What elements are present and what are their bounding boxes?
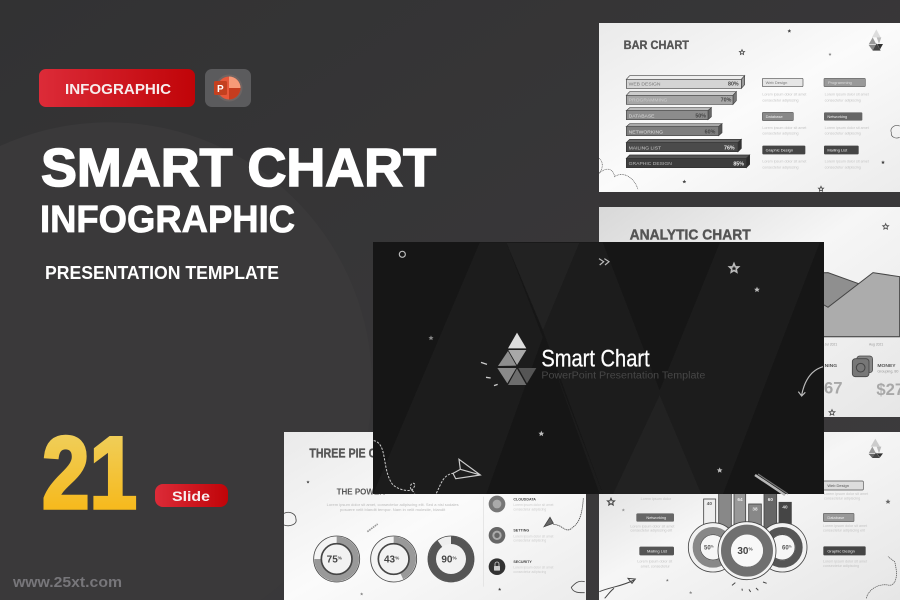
chart: area mountains bbox=[824, 272, 900, 338]
icon: paper plane bbox=[544, 498, 583, 530]
bar: mailing list bbox=[626, 139, 741, 152]
chart: donut 90 percent bbox=[428, 536, 474, 582]
icon: clouds bbox=[599, 125, 900, 189]
feature: cloud data: Lorem ipsum dolor sit amet bbox=[513, 503, 554, 507]
text: descriptions: consectetur adipiscing bbox=[825, 132, 861, 136]
bar: networking: NETWORKING bbox=[629, 129, 663, 135]
bar: graphic design bbox=[626, 155, 750, 168]
chart: vertical bars: 38 bbox=[752, 506, 758, 511]
stat: earning: 67 bbox=[824, 378, 843, 397]
badge: slide: Slide bbox=[172, 488, 210, 504]
icon: logo bbox=[869, 29, 883, 51]
bar: graphic design: GRAPHIC DESIGN bbox=[629, 161, 672, 167]
text: descriptions: Lorem ipsum dolor sit amet bbox=[824, 492, 868, 496]
icon: dashed trail bbox=[374, 441, 453, 493]
background arc bbox=[0, 122, 372, 600]
text: descriptions: Lorem ipsum dolor bbox=[641, 497, 672, 501]
text: descriptions: Lorem ipsum dolor sit amet bbox=[630, 524, 674, 528]
chart: donut 75 percent: % bbox=[338, 555, 343, 560]
text: descriptions: consectetur adipiscing bbox=[762, 132, 799, 136]
bar: programming: 70% bbox=[721, 98, 732, 104]
text: descriptions: Lorem ipsum dolor sit bbox=[637, 560, 672, 564]
chart: vertical bars: 40 bbox=[782, 504, 788, 509]
text: intro bbox=[327, 504, 458, 512]
labels: categories: Database bbox=[827, 515, 845, 520]
chart: donut 90 percent: % bbox=[452, 555, 457, 560]
text: descriptions: consectetur adipiscing elit bbox=[823, 528, 865, 532]
feature: security: consectetur adipiscing bbox=[513, 570, 546, 574]
chart: donut 43 percent: % bbox=[395, 555, 400, 560]
feature: setting: Lorem ipsum dolor sit amet bbox=[513, 534, 554, 538]
chart: donut 30 percent: 30 bbox=[737, 546, 748, 557]
title: smart chart: SMART CHART bbox=[41, 138, 436, 198]
feature: setting: consectetur adipiscing bbox=[513, 539, 546, 543]
labels: categories: Graphic Design bbox=[827, 548, 855, 553]
text: descriptions: Lorem ipsum dolor sit amet bbox=[762, 160, 806, 164]
chart: donut 60 percent: 60 bbox=[782, 546, 789, 552]
icon: doodles bbox=[399, 251, 823, 473]
bar: programming bbox=[626, 92, 736, 104]
chart: vertical bars: 40 bbox=[707, 501, 712, 506]
chart: donut 50 percent: % bbox=[711, 545, 714, 549]
panel: three pie chart slide bbox=[284, 432, 586, 600]
text: descriptions: consectetur adipiscing bbox=[825, 98, 861, 102]
labels: categories: Database bbox=[766, 114, 784, 119]
text: descriptions: amet, consectetur bbox=[641, 564, 671, 568]
text: descriptions: Lorem ipsum dolor sit amet bbox=[825, 93, 869, 97]
icon: money bbox=[852, 356, 873, 377]
stat: earning bbox=[824, 364, 842, 394]
bar: web design bbox=[626, 76, 745, 88]
panel: combo chart slide bbox=[599, 432, 900, 600]
chart: donut 43 percent bbox=[371, 536, 417, 582]
text: intro: posuere velit blandit tempor. Nam in velit molestie, blandit bbox=[340, 507, 446, 512]
chart: donut 50 percent bbox=[688, 522, 728, 572]
text: descriptions bbox=[762, 93, 869, 169]
stat: earning: NING bbox=[825, 363, 837, 369]
chart: donut 30 percent: % bbox=[748, 547, 753, 552]
chart: donut 50 percent: 50 bbox=[704, 546, 711, 552]
text: descriptions: Lorem ipsum dolor sit amet bbox=[825, 126, 869, 130]
chart: donut 90 percent: 90 bbox=[441, 555, 452, 566]
panel: bar chart slide bbox=[599, 23, 900, 192]
bar: database bbox=[626, 108, 711, 120]
icon: paper plane bbox=[453, 459, 480, 479]
chart: vertical bars: 64 bbox=[737, 497, 743, 502]
text: descriptions: Lorem ipsum dolor sit amet bbox=[762, 126, 806, 130]
icon: doodles bbox=[682, 29, 885, 191]
labels: categories: Mailing List bbox=[827, 147, 848, 152]
chart: donut 60 percent bbox=[766, 522, 808, 572]
feature: security: Lorem ipsum dolor sit amet bbox=[513, 566, 554, 570]
feature: cloud data bbox=[489, 496, 554, 512]
chart: donut 43 percent: 43 bbox=[384, 555, 395, 566]
panel: main cover slide bbox=[373, 242, 824, 494]
chart: donut 30 percent bbox=[718, 522, 776, 580]
feature: security bbox=[489, 558, 554, 575]
decorative panes bbox=[373, 243, 603, 494]
subheading: PowerPoint Presentation Template bbox=[541, 371, 706, 382]
icon: powerpoint: P bbox=[217, 84, 224, 95]
heading: analytic chart: ANALYTIC CHART bbox=[630, 227, 751, 243]
heading: bar chart: BAR CHART bbox=[624, 38, 690, 52]
feature: security: SECURITY bbox=[513, 560, 532, 564]
text: descriptions: Lorem ipsum dolor sit amet bbox=[823, 524, 867, 528]
bar: mailing list: MAILING LIST bbox=[629, 145, 661, 151]
feature: setting: SETTING bbox=[513, 529, 529, 533]
chart: donut 60 percent: % bbox=[789, 545, 792, 549]
bar: web design: WEB DESIGN bbox=[629, 82, 661, 88]
text: descriptions: Lorem ipsum dolor sit amet bbox=[825, 160, 869, 164]
text: descriptions: Lorem ipsum dolor sit amet bbox=[762, 93, 806, 97]
axis labels bbox=[824, 343, 883, 346]
labels: categories: Graphic Design bbox=[766, 147, 793, 152]
bar: networking: 60% bbox=[705, 130, 716, 136]
feature: cloud data: CLOUDDATA bbox=[513, 497, 536, 501]
axis labels: Jul 2021 bbox=[825, 342, 837, 346]
text: descriptions: consectetur adipiscing bbox=[762, 98, 799, 102]
labels: categories bbox=[636, 481, 866, 555]
bar: database: DATABASE bbox=[629, 113, 655, 119]
bar: networking bbox=[626, 124, 722, 136]
labels: categories: Web Design bbox=[766, 80, 787, 85]
heading: smart chart: Smart Chart bbox=[541, 346, 650, 373]
chart: donut 75 percent bbox=[314, 536, 360, 582]
bar: web design: 80% bbox=[728, 82, 739, 88]
text: intro: Lorem ipsum dolor sit amet, consectetur adipiscing elit. Sed a nisl sodales bbox=[327, 502, 459, 507]
icon: stars bbox=[829, 224, 889, 415]
subtitle: infographic: INFOGRAPHIC bbox=[40, 199, 295, 241]
red badge: infographic bbox=[39, 69, 195, 107]
chart: vertical bars: 60 bbox=[768, 497, 773, 502]
stat: money: Grouping, 80 bbox=[877, 370, 898, 374]
text: descriptions: consectetur adipiscing bbox=[825, 165, 861, 169]
badge: slide bbox=[155, 484, 228, 507]
labels: categories: Mailing List bbox=[647, 548, 668, 553]
labels: categories: Programming bbox=[828, 80, 852, 85]
chart: vertical bars bbox=[703, 494, 792, 528]
text: descriptions: consectetur adipiscing bbox=[762, 165, 799, 169]
stat: money: MONEY bbox=[877, 363, 896, 369]
feature: setting bbox=[489, 527, 554, 544]
subheading: THE POWER bbox=[337, 487, 385, 496]
labels: categories: Web Design bbox=[827, 483, 849, 488]
labels: categories: Networking bbox=[827, 114, 847, 119]
stat: money bbox=[876, 364, 900, 396]
tagline: PRESENTATION TEMPLATE bbox=[45, 263, 279, 283]
watermark: www.25xt.com bbox=[12, 574, 122, 591]
bar: mailing list: 76% bbox=[724, 145, 735, 151]
chart: donut 75 percent: 75 bbox=[327, 555, 338, 566]
bar: database: 50% bbox=[695, 114, 706, 120]
text: descriptions bbox=[630, 492, 868, 568]
bar: graphic design: 85% bbox=[733, 161, 744, 167]
axis labels: Aug 2021 bbox=[869, 342, 883, 346]
labels: categories bbox=[762, 78, 865, 154]
text: descriptions: consectetur adipiscing bbox=[824, 497, 860, 501]
heading: three pie chart: THREE PIE CHART bbox=[309, 447, 406, 461]
feature: cloud data: consectetur adipiscing bbox=[513, 507, 546, 511]
red badge: infographic: INFOGRAPHIC bbox=[65, 81, 171, 98]
text: descriptions: consectetur adipiscing bbox=[823, 564, 859, 568]
icon: clouds and stars bbox=[284, 480, 585, 595]
icon: pencil bbox=[755, 474, 788, 495]
icon: logo bbox=[869, 439, 883, 458]
bar: programming: PROGRAMMING bbox=[629, 98, 668, 104]
panel: analytic chart slide bbox=[599, 207, 900, 417]
icon: logo triangles bbox=[481, 333, 536, 386]
icon: powerpoint bbox=[205, 69, 251, 107]
icon: doodles bbox=[599, 498, 896, 598]
text: descriptions: consectetur adipiscing elit bbox=[630, 529, 672, 533]
text: descriptions: Lorem ipsum dolor sit amet bbox=[823, 560, 867, 564]
number: 21: 21 bbox=[42, 416, 137, 530]
labels: categories: Networking bbox=[646, 515, 666, 520]
